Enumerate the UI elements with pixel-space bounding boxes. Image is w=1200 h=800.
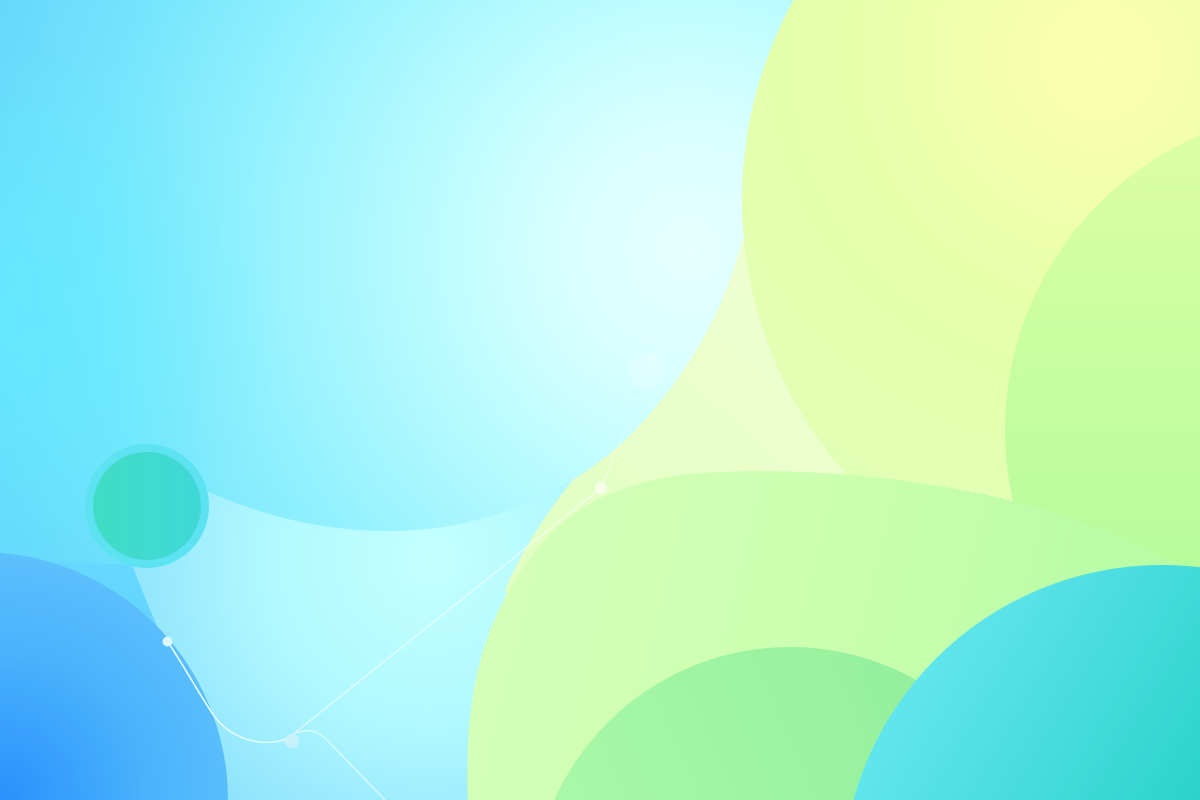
teal circle bottom right	[842, 565, 1200, 800]
connector lines and nodes	[162, 354, 665, 800]
pale blue lower region	[132, 479, 574, 800]
large blue circle	[0, 0, 800, 565]
background gradient	[50, 562, 158, 626]
right green circle	[1005, 136, 1200, 568]
lower green circle	[554, 647, 916, 800]
teal dot with halo	[85, 444, 209, 568]
middle green shape	[467, 471, 1200, 800]
left cyan glow	[0, 219, 182, 440]
blue circle bottom left	[0, 552, 228, 800]
pale yellow region	[505, 240, 847, 594]
yellow circle top right	[742, 0, 1200, 502]
